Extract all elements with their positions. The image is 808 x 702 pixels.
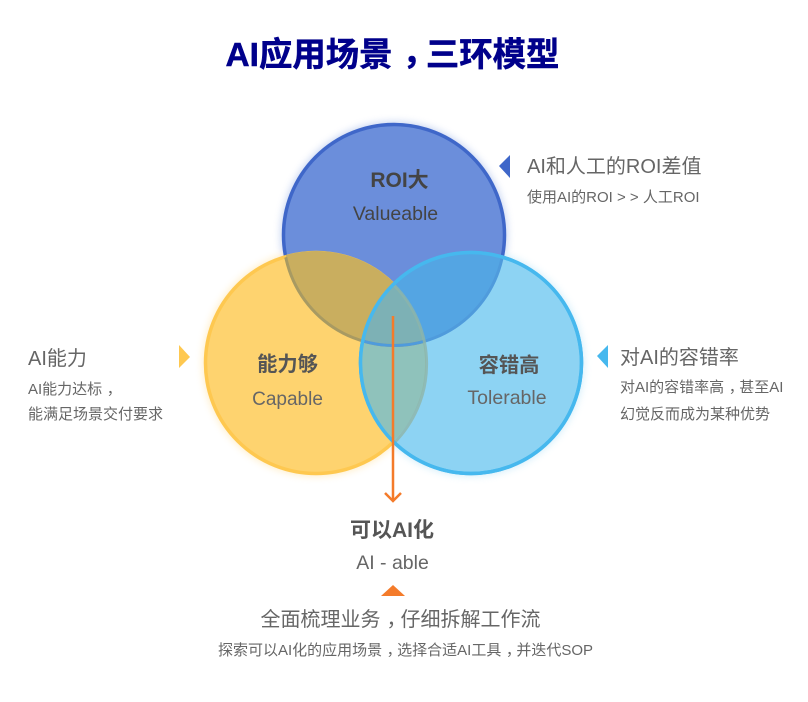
callout: capability: 能满足场景交付要求 [28,405,163,423]
footer text [218,608,593,659]
label: tolerable: Tolerable [467,387,547,409]
label: AI-able: 可以AI化 [350,519,434,542]
label: AI-able: AI - able [356,552,429,574]
overlap: ROI and tolerable [394,254,500,340]
callout: tolerance [620,346,783,423]
label: ROI [353,169,438,225]
callout: tolerance: 对AI的容错率高 ，甚至AI [620,379,783,396]
callout: ROI gap: AI和人工的ROI差值 [527,155,701,178]
title: 三环模型 [426,37,559,74]
circle: capable [206,252,426,474]
callout: tolerance: 幻觉反而成为某种优势 [620,406,770,423]
yellow edge inside tolerable [394,285,427,443]
circle: tolerable [360,252,582,474]
overlap: ROI and capable [286,251,394,339]
icon: orange triangle [381,585,405,596]
callout: capability [28,347,163,423]
title: ， [403,35,436,72]
callout: capability: AI能力 [28,347,87,370]
icon: yellow pointer [179,345,190,368]
tolerable edge on top [360,252,582,474]
label: capable: 能力够 [257,353,318,376]
blue edge inside capable [284,257,423,347]
callout: capability: AI能力达标 ， [28,381,122,398]
title: AI应用场景 [226,37,392,74]
blue edge inside tolerable [364,258,504,347]
label: tolerable: 容错高 [479,353,539,377]
callout: tolerance: 对AI的容错率 [620,346,739,369]
label: capable [252,353,323,410]
icon: light blue pointer [597,345,608,368]
label: ROI: Valueable [353,203,438,225]
footer text: 探索可以AI化的应用场景 ，选择合适AI工具 ，并迭代SOP [218,641,593,659]
venn diagram [203,122,584,476]
overlap: centre [365,287,422,344]
circle: ROI [284,124,504,346]
label: capable: Capable [252,389,323,410]
arrow: down to AI-able [385,316,401,501]
label: AI-able [350,519,434,574]
callout: ROI gap: 使用AI的ROI > > 人工ROI [527,189,700,206]
icon: blue pointer [499,155,510,178]
label: tolerable [467,353,547,409]
overlap: capable and tolerable [362,343,426,440]
callout: ROI gap [527,155,701,206]
circle glows [203,122,584,476]
footer text: 全面梳理业务 ，仔细拆解工作流 [260,608,540,631]
label: ROI: ROI大 [370,169,429,192]
